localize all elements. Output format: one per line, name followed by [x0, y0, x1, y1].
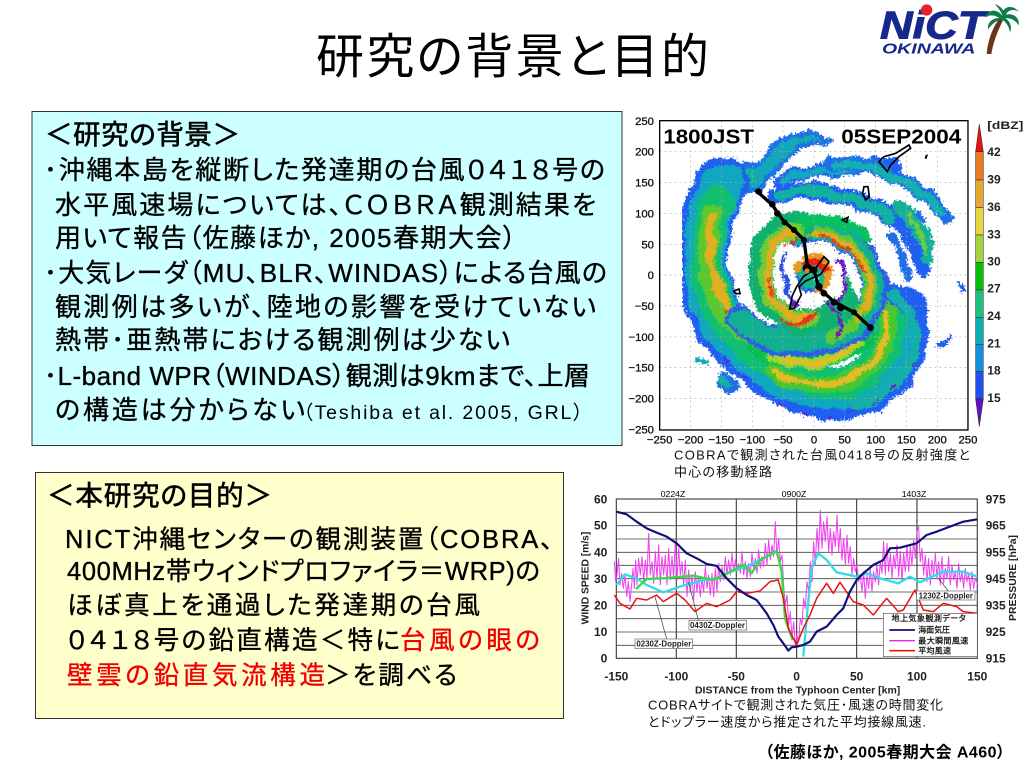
right axis labels: 945 — [986, 572, 1006, 586]
outer purple flecks — [696, 318, 914, 420]
series: mean wind — [614, 580, 977, 645]
text block: background bullets: ･沖縄本島を縦断した発達期の台風０４１８号の — [44, 155, 605, 185]
colour bar labels: 36 — [987, 200, 1001, 214]
date labels: 1800JST — [663, 127, 754, 149]
text block: purpose: NICT沖縄センターの観測装置（COBRA、 — [65, 526, 553, 554]
text block: purpose: ＞を調べる — [325, 662, 457, 690]
legend: 最大瞬間風速 — [918, 635, 968, 645]
text block: purpose: ほぼ真上を通過した発達期の台風 — [67, 592, 480, 620]
right axis labels: 955 — [986, 545, 1006, 559]
colour bar labels: 18 — [987, 364, 1001, 378]
panel: research purpose — [36, 472, 564, 718]
bottom axis labels: -100 — [664, 669, 689, 683]
coastlines — [734, 145, 911, 309]
text block: purpose: ０４１８号の鉛直構造＜特に — [67, 627, 400, 655]
series: doppler 0230Z / 1230Z — [616, 552, 977, 657]
right axis labels: 965 — [986, 519, 1006, 533]
eye region — [826, 272, 848, 300]
plot frame — [660, 121, 968, 430]
legend: 海面気圧 — [918, 625, 950, 635]
right axis labels — [986, 492, 1006, 665]
axis titles: WIND SPEED [m/s] — [580, 532, 591, 624]
leader lines — [655, 578, 948, 639]
y axis labels — [628, 116, 654, 436]
left axis labels: 10 — [594, 625, 608, 639]
text block: purpose — [65, 526, 553, 690]
inner ring — [760, 224, 847, 322]
right axis labels: 915 — [986, 651, 1006, 665]
middle ring — [739, 230, 875, 345]
top time labels: 0900Z — [782, 489, 807, 499]
bottom axis labels: 150 — [967, 669, 988, 683]
label: 1230Z: 1230Z-Doppler — [919, 590, 974, 600]
text block: background bullets: 水平風速場については、ＣＯＢＲＡ観測結果を — [55, 190, 596, 220]
x axis labels: −250 — [647, 435, 672, 447]
left axis labels: 50 — [594, 519, 608, 533]
series: surface pressure — [616, 512, 977, 651]
bottom axis labels: -50 — [728, 669, 745, 683]
axis titles: DISTANCE from the Typhoon Center [km] — [695, 686, 900, 697]
bottom axis labels: 50 — [850, 669, 864, 683]
caption: radar: COBRAで観測された台風0418号の反射強度と — [674, 448, 970, 462]
date labels: 05SEP2004 — [841, 127, 961, 149]
x axis labels: −200 — [678, 435, 703, 447]
left axis labels: 30 — [594, 572, 608, 586]
right axis labels: 935 — [986, 598, 1006, 612]
chart: wind speed and pressure — [580, 489, 1019, 697]
colour bar labels: 33 — [987, 227, 1001, 241]
lower right band — [857, 292, 919, 410]
heading: background: ＜研究の背景＞ — [45, 119, 240, 150]
heading: purpose: ＜本研究の目的＞ — [47, 480, 272, 511]
radar echo field — [696, 132, 964, 420]
legend: 平均風速 — [918, 645, 951, 655]
small echo patches — [724, 382, 731, 387]
y axis labels: 0 — [648, 270, 654, 282]
typhoon track — [756, 188, 874, 331]
y axis labels: 250 — [635, 116, 654, 128]
colour bar labels: 39 — [987, 173, 1001, 187]
text block: background bullets: 熱帯･亜熱帯における観測例は少ない — [55, 325, 510, 355]
right axis labels: 925 — [986, 625, 1006, 639]
series: max gust — [614, 510, 978, 645]
text block: purpose: 400MHz帯ウィンドプロファイラ＝WRP)の — [67, 558, 540, 586]
caption: radar: 中心の移動経路 — [674, 464, 772, 480]
y axis labels: −200 — [628, 394, 654, 406]
text block: background bullets: ･大気レーダ（MU、BLR、WINDAS）による台風の — [44, 258, 607, 288]
x axis labels: −50 — [773, 435, 793, 447]
x axis labels: 250 — [959, 435, 977, 447]
caption: time series: とドップラー速度から推定された平均接線風速. — [648, 714, 926, 730]
caption: time series — [648, 698, 943, 730]
label: 0230Z: 0230Z-Doppler — [636, 639, 692, 649]
top time labels: 0224Z — [661, 489, 686, 499]
logo: NICT Okinawa — [880, 3, 1019, 57]
series: doppler 0430Z — [636, 551, 793, 640]
bottom axis labels — [604, 669, 988, 683]
bottom axis labels: 100 — [907, 669, 927, 683]
right axis labels: 975 — [986, 492, 1006, 506]
colour bar labels: [dBZ] — [987, 120, 1024, 132]
text block: background bullets: ･L-band WPR（WINDAS）観測は9kmまで、上層 — [44, 361, 590, 391]
colour bar labels: 24 — [987, 309, 1001, 323]
x axis labels: 100 — [866, 435, 885, 447]
colour bar labels: 21 — [987, 336, 1001, 350]
grid lines — [616, 499, 977, 658]
logo: NICT Okinawa: OKINAWA — [882, 41, 975, 57]
bottom axis labels: 0 — [793, 669, 800, 683]
colour bar labels — [987, 120, 1024, 405]
grid lines — [660, 121, 968, 430]
legend — [883, 613, 977, 657]
top time labels: 1403Z — [902, 489, 927, 499]
left axis labels: 40 — [594, 545, 608, 559]
colour bar labels: 27 — [987, 282, 1001, 296]
colour bar labels: 15 — [987, 391, 1001, 405]
title: 研究の背景と目的 — [316, 31, 709, 84]
text block: background bullets: （Teshiba et al. 2005, GRL） — [303, 402, 583, 424]
caption: radar — [674, 448, 970, 480]
left axis labels: 60 — [594, 492, 608, 506]
colour bar — [976, 124, 983, 427]
text block: purpose: 台風の眼の — [400, 627, 540, 655]
date labels — [663, 127, 961, 149]
y axis labels: −250 — [628, 424, 654, 436]
left axis labels: 0 — [601, 651, 608, 665]
citation: （佐藤ほか, 2005春期大会 A460） — [765, 742, 1005, 762]
text block: background bullets: 観測例は多いが、陸地の影響を受けていない — [55, 292, 596, 322]
panel: research background — [32, 112, 622, 446]
colour bar labels: 42 — [987, 145, 1001, 159]
y axis labels: −50 — [635, 301, 654, 313]
outer spiral band — [702, 183, 901, 394]
axis titles: PRESSURE [hPa] — [1008, 535, 1019, 621]
x axis labels: −100 — [740, 435, 765, 447]
bottom axis labels: -150 — [604, 669, 629, 683]
y axis labels: 50 — [641, 239, 654, 251]
x axis labels — [647, 435, 977, 447]
y axis labels: 150 — [635, 178, 654, 190]
x axis labels: −150 — [709, 435, 734, 447]
lower bands — [771, 308, 889, 385]
y axis labels: 100 — [635, 208, 654, 220]
y axis labels: −100 — [628, 332, 654, 344]
y axis labels: −150 — [628, 363, 654, 375]
legend: 地上気象観測データ — [892, 613, 966, 623]
y axis labels: 200 — [635, 147, 654, 159]
axis titles — [580, 532, 1019, 697]
x axis labels: 0 — [811, 435, 817, 447]
top spiral bands — [781, 163, 891, 180]
left axis labels: 20 — [594, 598, 608, 612]
x axis labels: 200 — [928, 435, 947, 447]
text block: background bullets — [44, 155, 607, 425]
x axis labels: 50 — [838, 435, 851, 447]
logo: NICT Okinawa: NiCT — [880, 3, 989, 47]
left axis labels — [594, 492, 608, 665]
text block: background bullets: 用いて報告（佐藤ほか, 2005春期大会） — [55, 223, 516, 253]
text block: purpose: 壁雲の鉛直気流構造 — [67, 662, 325, 690]
x axis labels: 150 — [897, 435, 916, 447]
top-left patch — [742, 128, 834, 196]
top time labels — [661, 489, 927, 499]
text block: background bullets: の構造は分からない — [55, 395, 305, 425]
label: 0430Z: 0430Z-Doppler — [690, 620, 746, 630]
caption: time series: COBRAサイトで観測された気圧･風速の時間変化 — [648, 698, 943, 712]
chart: radar reflectivity map — [628, 116, 1024, 447]
colour bar labels: 30 — [987, 255, 1001, 269]
